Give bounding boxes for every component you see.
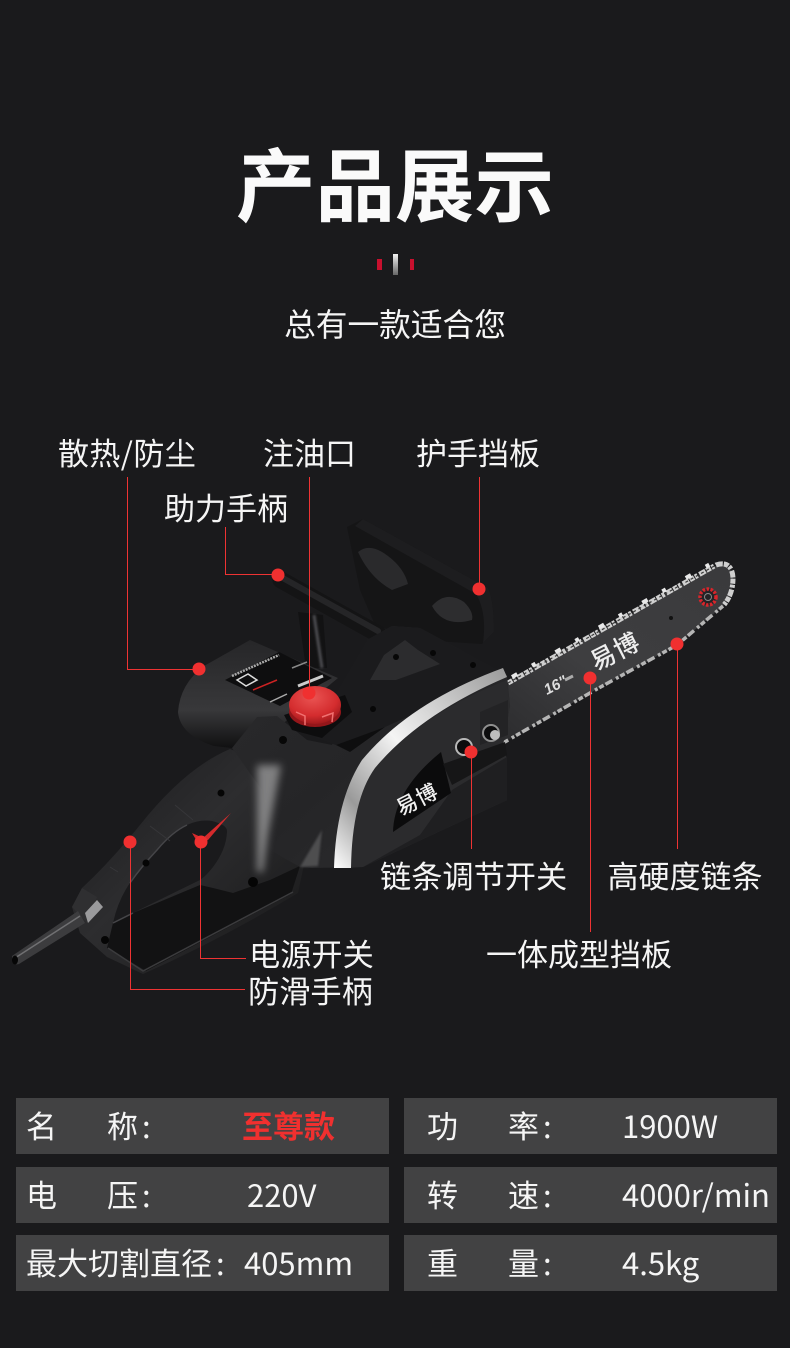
callout: hand guard: 护手挡板 bbox=[416, 429, 540, 474]
callout: one-piece baffle bbox=[486, 672, 672, 975]
lower guard plate bbox=[107, 866, 300, 971]
spec row: voltage: 电 bbox=[26, 1171, 57, 1216]
spec row: speed: 转 bbox=[427, 1171, 458, 1216]
chain cover bbox=[345, 680, 510, 868]
end cap bbox=[72, 888, 97, 923]
callout: chain adjuster: 链条调节开关 bbox=[380, 852, 567, 897]
guide bar and chain bbox=[503, 563, 733, 743]
callout: power switch bbox=[194, 836, 374, 975]
spec row: speed: 4000r/min bbox=[622, 1171, 770, 1216]
callout: hardened chain bbox=[608, 638, 762, 897]
spec row: speed bbox=[404, 1167, 777, 1223]
chainsaw product illustration bbox=[12, 519, 733, 974]
callout: hand guard bbox=[416, 429, 540, 596]
spec row: max cutting diameter bbox=[16, 1235, 389, 1291]
spec row: weight bbox=[404, 1235, 777, 1291]
title ornament marks bbox=[377, 254, 414, 275]
callout: assist handle bbox=[164, 484, 288, 582]
spec row: name: 至尊款 bbox=[242, 1102, 335, 1147]
callout: assist handle: 助力手柄 bbox=[164, 484, 288, 529]
handle opening bbox=[113, 820, 227, 923]
callout: power switch: 电源开关 bbox=[249, 930, 374, 975]
bar logo: 易博 bbox=[583, 622, 646, 678]
spec row: power bbox=[404, 1098, 777, 1154]
rear grip and trigger guard bbox=[72, 749, 305, 974]
callout: heat dissipation bbox=[58, 429, 206, 676]
subtitle: 总有一款适合您 bbox=[284, 300, 506, 346]
spec row: voltage bbox=[16, 1167, 389, 1223]
bar size mark: 16" bbox=[541, 672, 571, 699]
top ridge bbox=[315, 626, 505, 745]
callout: anti-slip handle: 防滑手柄 bbox=[248, 967, 373, 1012]
callout: oil filler bbox=[263, 429, 356, 700]
spec row: name: 称: bbox=[107, 1102, 151, 1147]
assist handle bbox=[281, 577, 378, 668]
spec row: voltage: 压: bbox=[107, 1171, 151, 1216]
spec row: weight: 量: bbox=[508, 1239, 552, 1284]
callout: oil filler: 注油口 bbox=[263, 429, 356, 474]
spec row: max cutting diameter: 最大切割直径: bbox=[26, 1239, 225, 1284]
callout: anti-slip handle bbox=[124, 836, 373, 1012]
spec row: weight: 4.5kg bbox=[622, 1239, 700, 1284]
logo badge bbox=[393, 752, 451, 832]
title: 产品展示 bbox=[236, 123, 554, 238]
callout: chain adjuster bbox=[380, 746, 567, 897]
spec row: weight: 重 bbox=[427, 1239, 458, 1284]
silver arc trim bbox=[334, 668, 507, 868]
spec row: name: 名 bbox=[26, 1102, 57, 1147]
main body housing: 易博 bbox=[391, 776, 443, 822]
power cord sleeve bbox=[12, 911, 85, 964]
spec row: max cutting diameter: 405mm bbox=[244, 1239, 353, 1284]
main body housing bbox=[232, 626, 510, 872]
specification label plate bbox=[225, 652, 332, 706]
grip ridges bbox=[113, 825, 187, 923]
oil cap bbox=[284, 686, 352, 738]
callout: one-piece baffle: 一体成型挡板 bbox=[486, 930, 672, 975]
adjustment bolts bbox=[443, 742, 507, 785]
hand guard bbox=[347, 519, 494, 644]
body vertical highlight bbox=[257, 765, 281, 872]
sprocket bbox=[700, 589, 716, 605]
spec row: speed: 速: bbox=[508, 1171, 552, 1216]
spec row: name bbox=[16, 1098, 389, 1154]
callout: hardened chain: 高硬度链条 bbox=[608, 852, 762, 897]
callout: heat dissipation: 散热/防尘 bbox=[58, 429, 196, 474]
spec row: power: 功 bbox=[427, 1102, 458, 1147]
spec row: voltage: 220V bbox=[247, 1171, 317, 1216]
spec row: power: 1900W bbox=[622, 1102, 718, 1147]
trigger bbox=[192, 813, 231, 843]
motor cover bbox=[178, 640, 338, 748]
spec row: power: 率: bbox=[508, 1102, 552, 1147]
